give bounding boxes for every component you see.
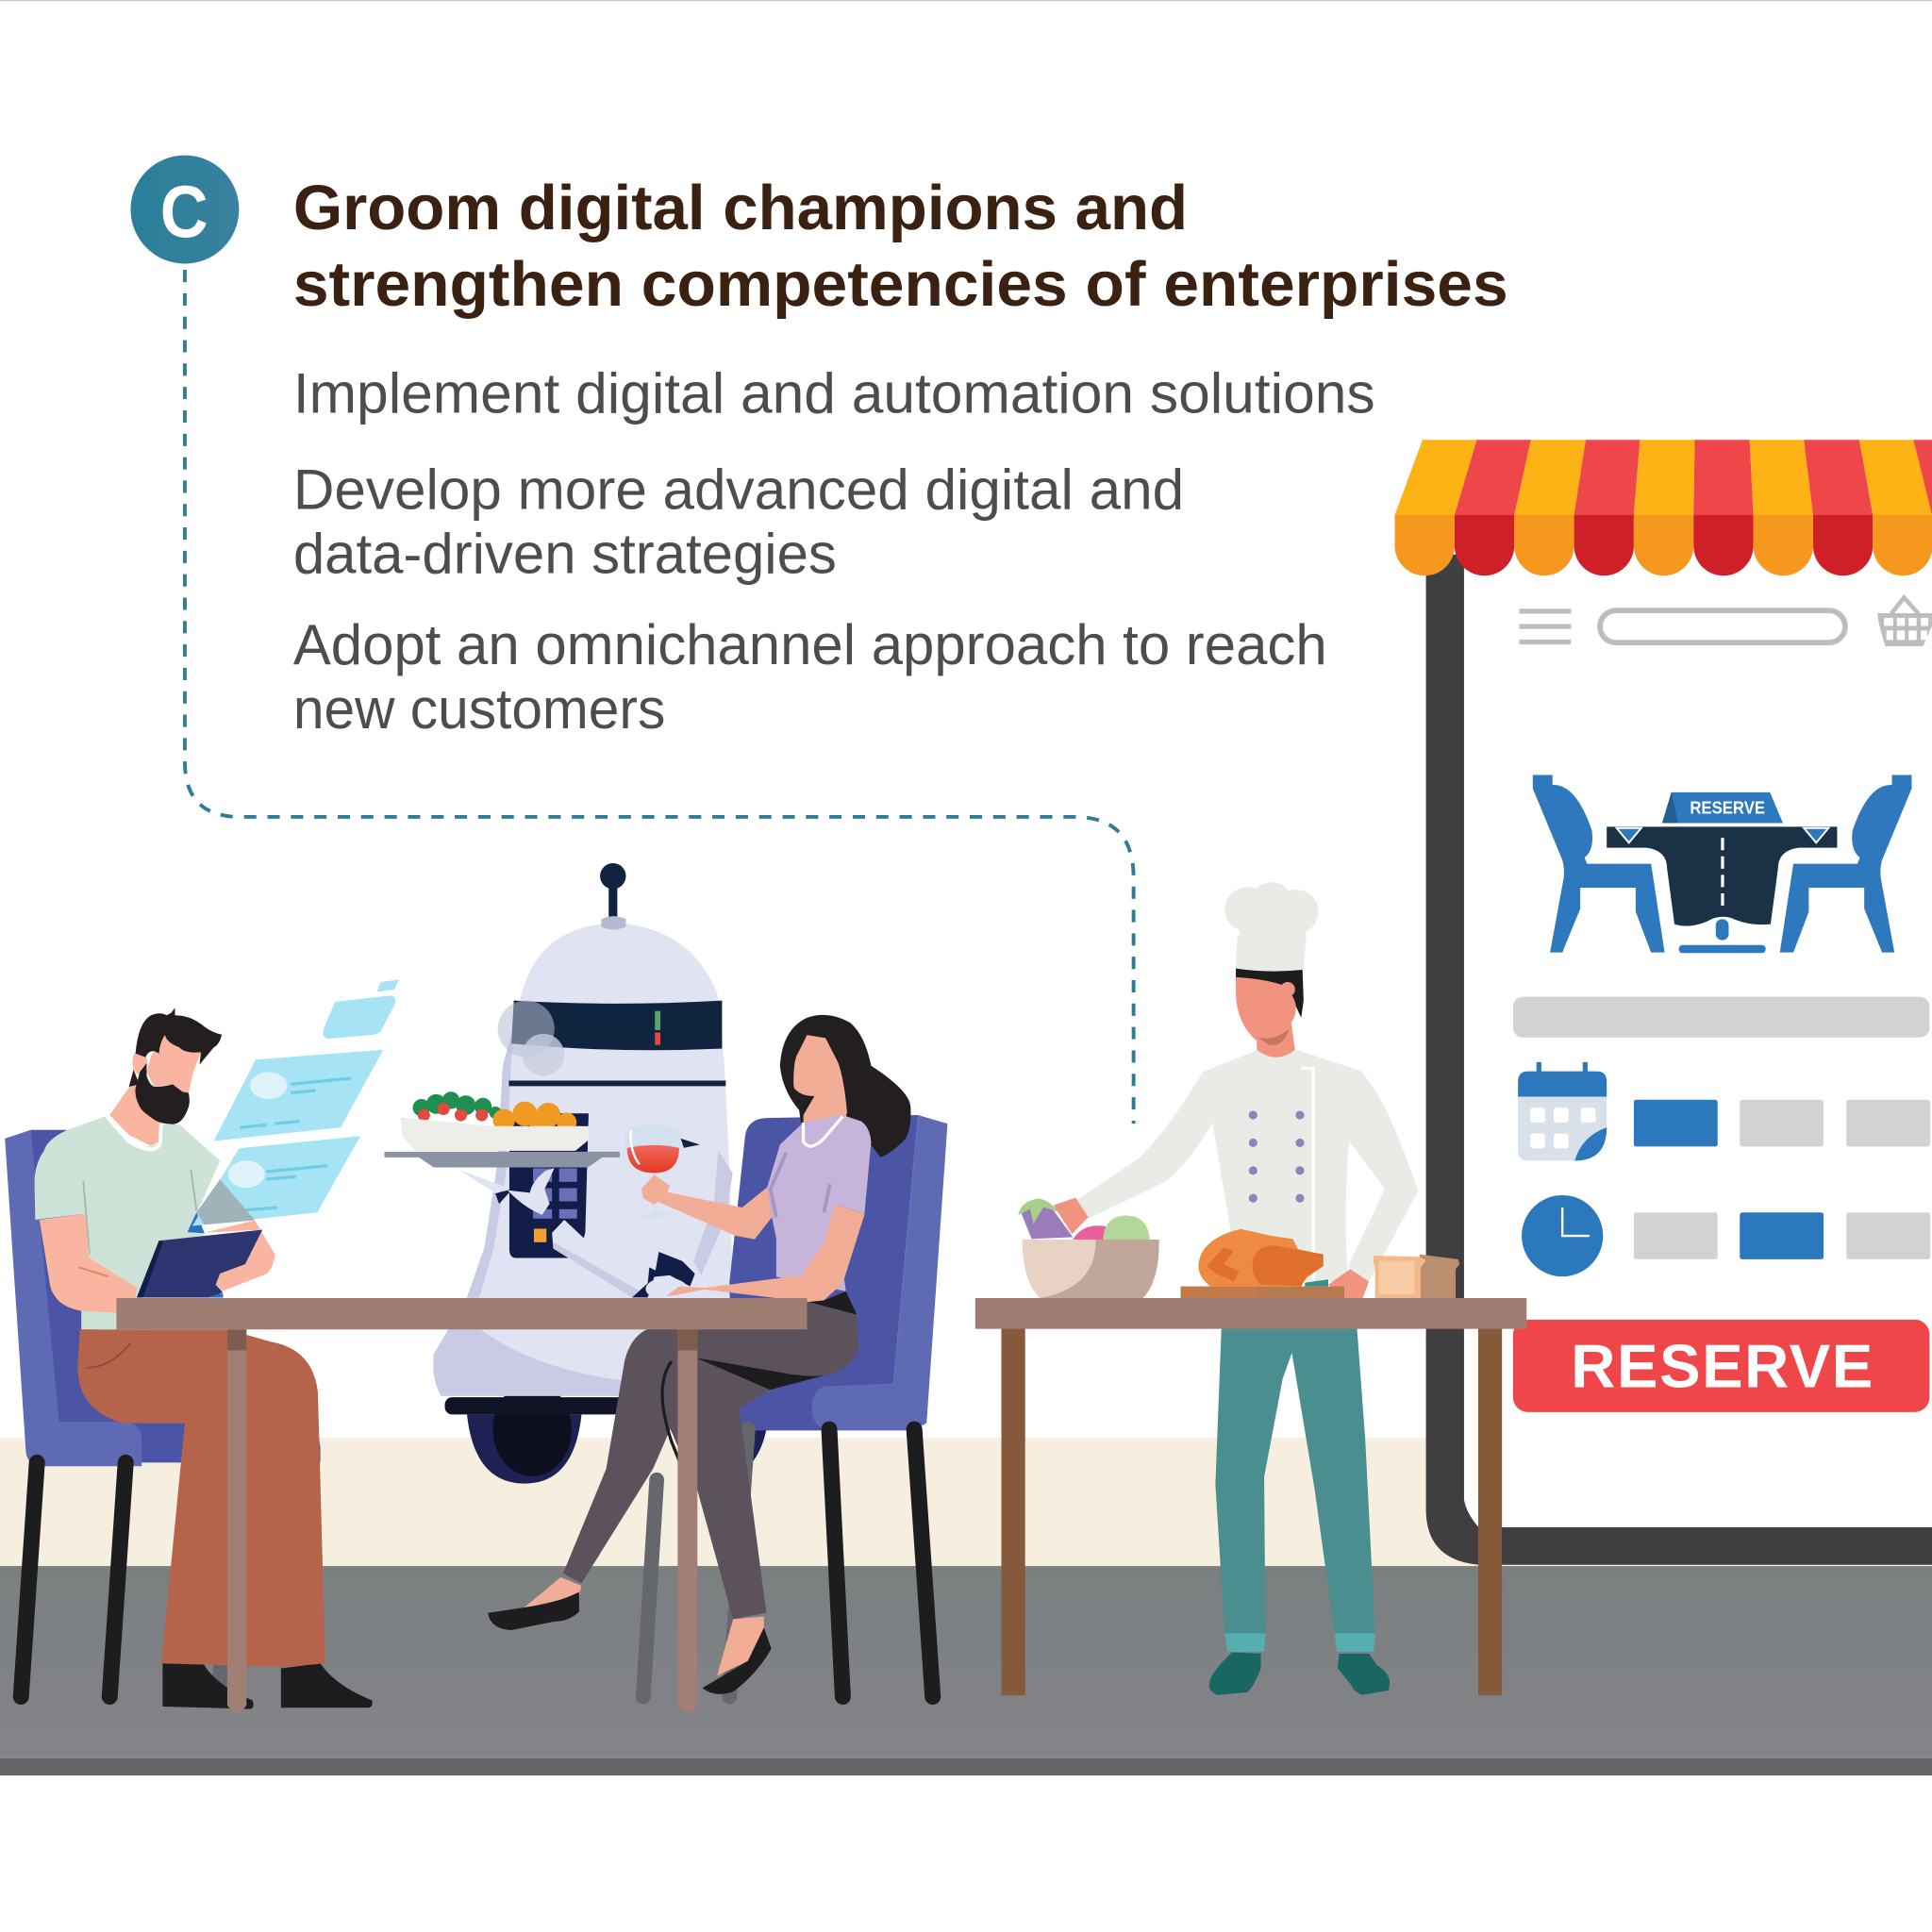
chef's right hand (1328, 1269, 1369, 1298)
date slots (1634, 1100, 1930, 1146)
chef's jacket (1077, 1050, 1418, 1281)
digital hologram panels (192, 979, 399, 1226)
man's t-shirt (35, 1116, 228, 1329)
woman's forearm (658, 1187, 772, 1240)
tablet (137, 1230, 262, 1297)
robot lower body (433, 1297, 665, 1396)
robot visor (511, 1001, 722, 1050)
chef's trousers (1215, 1306, 1375, 1633)
heading: strengthen competencies of enterprises (293, 250, 1508, 320)
robot antenna (608, 887, 617, 921)
robot waiter (433, 863, 766, 1484)
heading (293, 174, 1508, 320)
woman with wine glass (488, 1015, 910, 1694)
body text list: new customers (293, 677, 665, 741)
reserve button (1513, 1320, 1929, 1412)
man's chair (5, 1130, 321, 1697)
body text list: Develop more advanced digital and (293, 458, 1184, 521)
background: wall band and floor (0, 1438, 1932, 1775)
chef's table (975, 1298, 1526, 1695)
storefront awning (1395, 440, 1932, 575)
robot chest panel (509, 1113, 589, 1258)
search bar (1600, 610, 1845, 642)
robot head and torso (467, 923, 733, 1297)
robot front wheel (467, 1414, 581, 1484)
robot right arm (552, 1220, 640, 1297)
heading: Groom digital champions and (293, 174, 1188, 243)
section badge C: C (160, 170, 208, 253)
body text list (293, 362, 1375, 741)
man's hair (129, 1008, 222, 1087)
man's beard (135, 1063, 190, 1124)
tray with food (385, 1091, 620, 1168)
roast chicken on board (1181, 1229, 1344, 1298)
waistband (808, 1291, 857, 1315)
icon: basket (1877, 597, 1932, 646)
storefront phone interior (1464, 1429, 1932, 1530)
body text list: data-driven strategies (293, 522, 837, 585)
chef's hair (1236, 967, 1304, 1018)
woman's hair (780, 1015, 910, 1158)
chef's hat (1224, 882, 1319, 972)
body text list: Implement digital and automation solutions (293, 362, 1375, 425)
section badge C (130, 156, 239, 264)
icon: clock (1522, 1195, 1603, 1276)
woman's trousers (563, 1302, 858, 1619)
dashed connector (185, 270, 1134, 1124)
robot serving hand (459, 1170, 507, 1194)
man's shoes (162, 1663, 373, 1709)
man's neck (109, 1078, 161, 1146)
form bar (1513, 997, 1929, 1038)
bread loaf (1374, 1255, 1459, 1298)
robot rear wheel (672, 1429, 766, 1482)
wine glass (625, 1124, 683, 1173)
icon: calendar (1518, 1062, 1607, 1160)
woman's chair (643, 1115, 947, 1697)
icon: menu (1519, 611, 1571, 641)
man with tablet (35, 1008, 373, 1709)
man's trousers (77, 1329, 325, 1667)
woman's near arm (667, 1205, 865, 1302)
woman's hand (641, 1174, 670, 1205)
icon: reserved table (1533, 775, 1911, 953)
chef's cuffs (1224, 1633, 1375, 1652)
reserve button: RESERVE (1571, 1332, 1873, 1401)
man's near arm (40, 1214, 137, 1313)
woman's shoes (524, 1577, 581, 1607)
man's far arm (205, 1220, 275, 1291)
storefront phone frame (1426, 555, 1932, 1565)
body text list: Adopt an omnichannel approach to reach (293, 613, 1327, 676)
chef's shoes (1209, 1653, 1390, 1695)
blouse (767, 1115, 871, 1291)
vegetable bowl (1018, 1198, 1159, 1298)
man's face (146, 1035, 201, 1093)
icon: reserved table: RESERVE (1690, 798, 1765, 818)
woman's face and neck (793, 1035, 847, 1141)
chef's face (1236, 977, 1296, 1058)
chef (1077, 882, 1418, 1695)
dining table (116, 1298, 808, 1713)
time slots (1634, 1212, 1930, 1259)
